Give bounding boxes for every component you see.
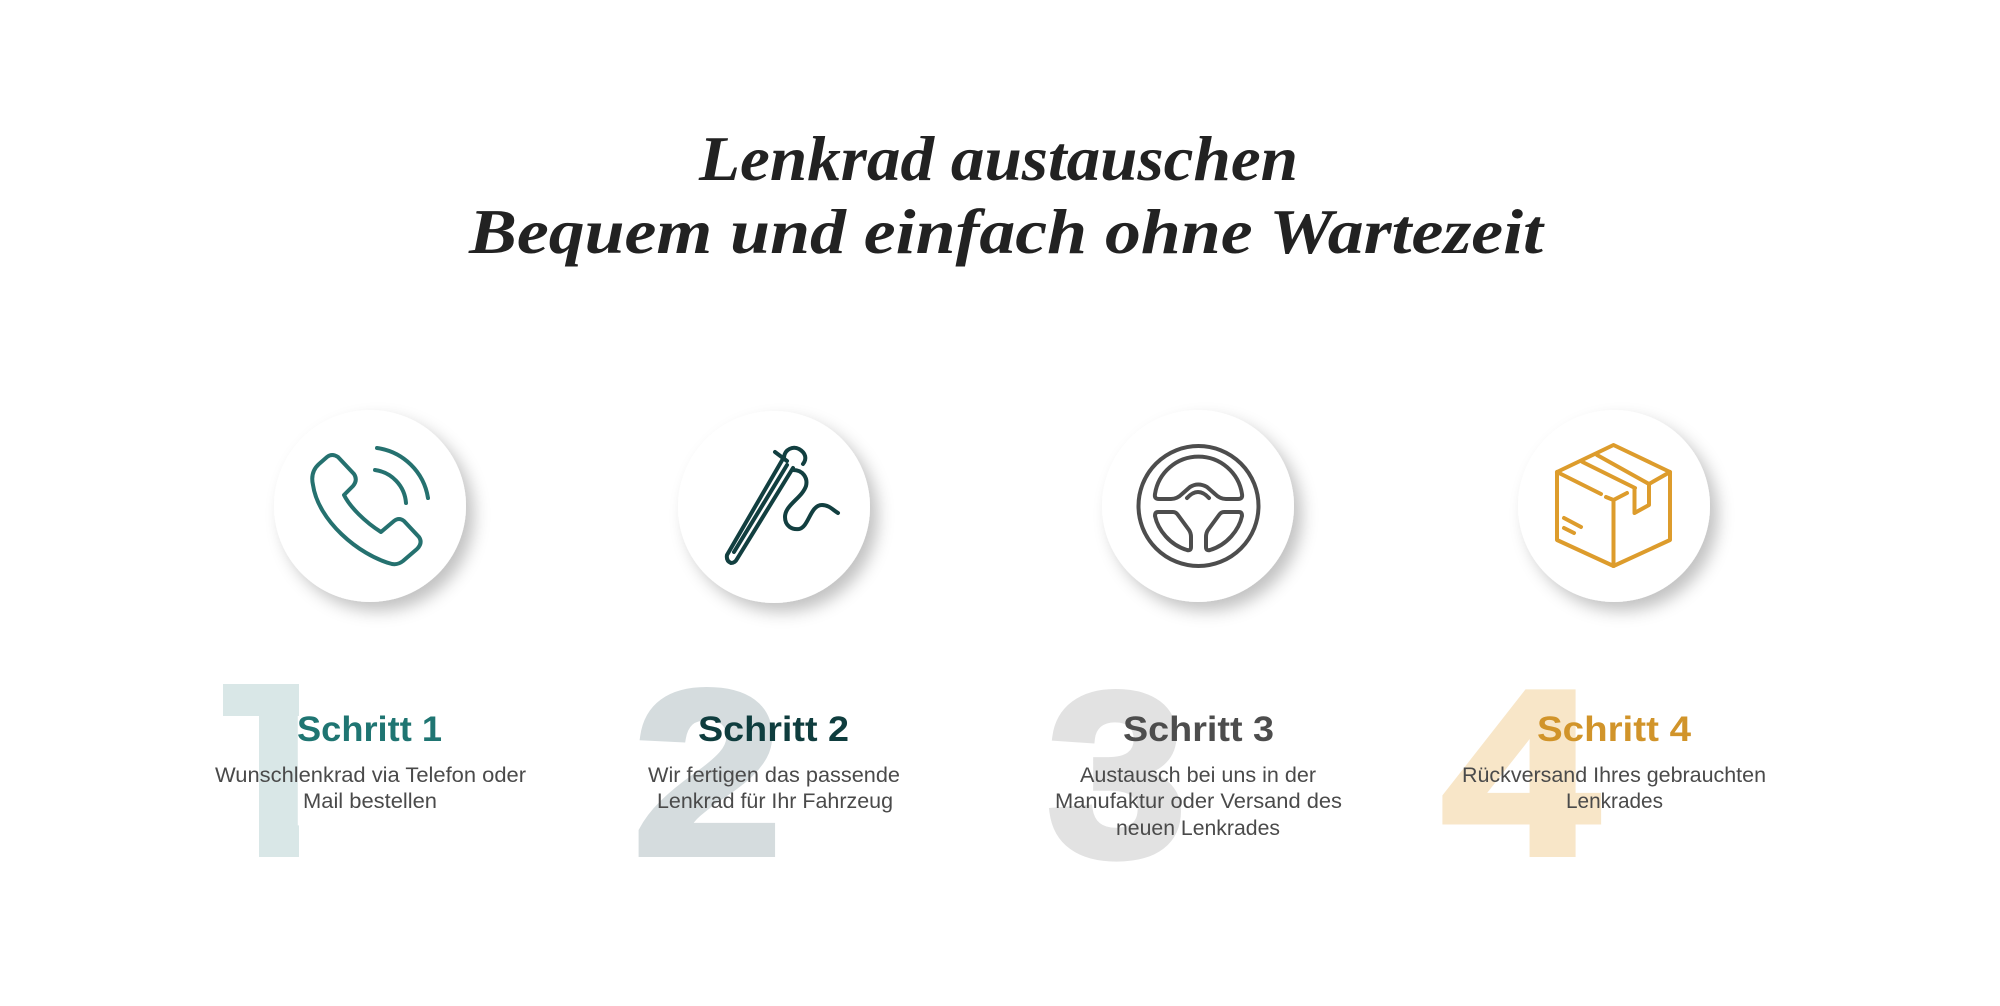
description: step 2: Wir fertigen das passende (648, 764, 900, 787)
title (468, 123, 1545, 267)
title: Bequem und einfach ohne Wartezeit (468, 196, 1545, 267)
heading: Schritt 1: Schritt 1 (297, 710, 442, 749)
description: step 4: Rückversand Ihres gebrauchten (1462, 764, 1766, 787)
large number 1: 1 (197, 644, 342, 903)
description: step 1 (215, 764, 526, 813)
heading: Schritt 4: Schritt 4 (1537, 710, 1692, 749)
large number 3: 3 (1048, 645, 1186, 904)
panel: step 2 (634, 411, 900, 902)
large number 1 (223, 684, 299, 857)
icon: steering wheel (1102, 410, 1294, 602)
heading: Schritt 3: Schritt 3 (1123, 710, 1274, 749)
description: step 3: Manufaktur oder Versand des (1055, 790, 1342, 813)
heading: Schritt 2: Schritt 2 (698, 710, 849, 749)
panel: step 3 (1048, 410, 1342, 904)
description: step 4: Lenkrades (1566, 790, 1663, 813)
description: step 1: Wunschlenkrad via Telefon oder (215, 764, 526, 787)
title: Lenkrad austauschen (698, 123, 1298, 194)
panel: step 1 (215, 412, 526, 857)
description: step 3 (1055, 764, 1342, 840)
description: step 3: neuen Lenkrades (1116, 817, 1280, 840)
description: step 2 (648, 764, 900, 813)
description: step 3: Austausch bei uns in der (1080, 764, 1316, 787)
large number 2: 2 (634, 643, 781, 902)
icon: phone (274, 410, 466, 602)
description: step 2: Lenkrad für Ihr Fahrzeug (657, 790, 893, 813)
description: step 4 (1462, 764, 1766, 813)
large number 4: 4 (1443, 644, 1600, 903)
panel: step 4 (1443, 410, 1766, 903)
icon: parcel box (1518, 410, 1710, 602)
icon: needle and thread (678, 411, 870, 603)
description: step 1: Mail bestellen (303, 790, 437, 813)
